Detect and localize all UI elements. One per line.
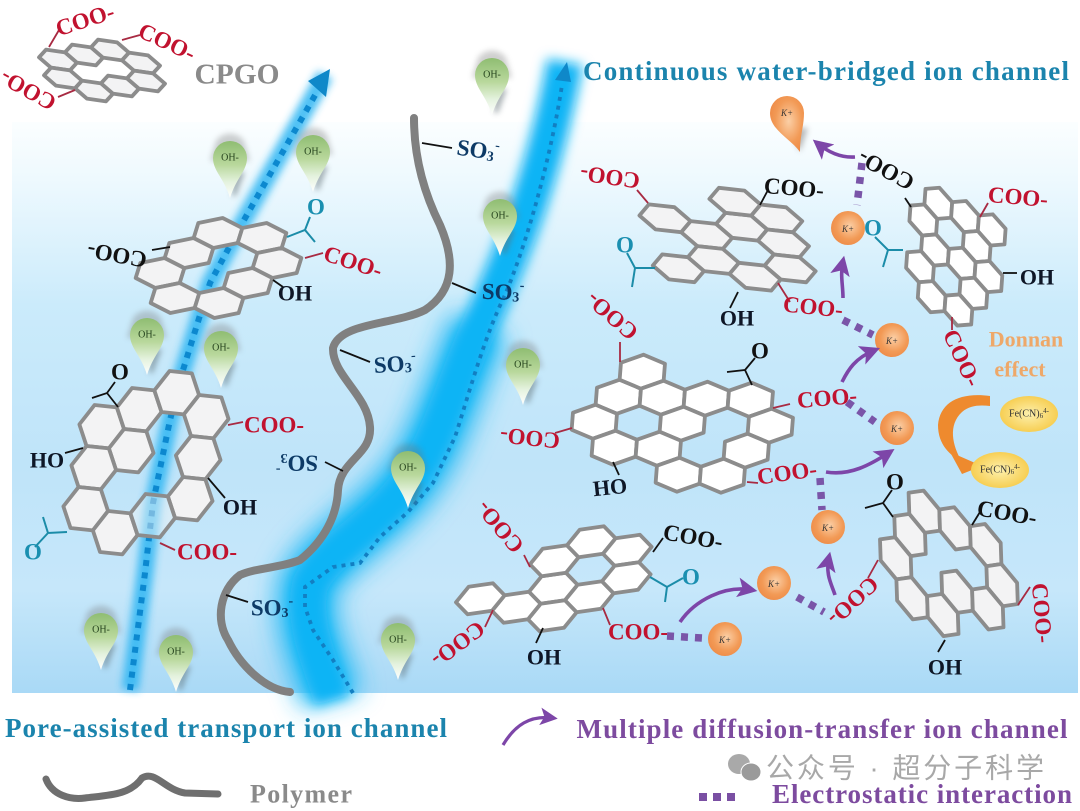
sheet: upper centre right: COO- (579, 160, 641, 194)
sheet: lower left: OH (223, 494, 257, 520)
Donnan effect arrows and Fe(CN)6 ions: 4- (1014, 463, 1021, 471)
sheet: upper centre right: COO- (782, 291, 844, 323)
sheet: lower right (823, 470, 1057, 680)
sheet: upper far right: COO- (854, 145, 918, 195)
Donnan effect label (989, 326, 1063, 382)
OH- ions: OH- (514, 360, 532, 370)
K+ ions and transfer paths: K+ (841, 224, 854, 234)
SO3 side groups: - (289, 594, 294, 608)
OH- ions: OH- (483, 70, 501, 80)
K+ ions and transfer paths: K+ (885, 336, 898, 346)
Donnan effect label: Donnan (989, 326, 1063, 352)
panel: membrane background (12, 122, 1078, 693)
legend arrow: multiple diffusion (503, 717, 553, 745)
sheet: lower left: COO- (244, 412, 304, 438)
Donnan effect arrows and Fe(CN)6 ions: 4- (1043, 407, 1050, 415)
legend label: polymer: Polymer (250, 780, 352, 808)
sheet: upper far right: COO- (938, 325, 986, 391)
K+ ions and transfer paths: K+ (780, 108, 793, 118)
channel dots: pore-assisted (130, 90, 318, 690)
Donnan effect arrows and Fe(CN)6 ions: 6 (1040, 412, 1044, 420)
sheet: lower right: COO- (975, 495, 1039, 531)
sheet: lower left: O (24, 540, 42, 564)
sheet: upper far right (850, 145, 1054, 391)
sheet: upper left: O (307, 194, 325, 220)
sheet: upper far right: COO- (987, 182, 1049, 212)
sheet: upper left: COO- (321, 241, 385, 283)
CPGO legend sheet: COO- (134, 18, 200, 66)
sheet: lower left: O (111, 360, 129, 384)
K+ ions and transfer paths (680, 96, 914, 656)
OH- ions: OH- (304, 146, 322, 158)
sheet: lower centre: O (682, 564, 700, 590)
caption: multiple diffusion-transfer channel: Multiple diffusion-transfer ion channel (576, 714, 1068, 744)
SO3 side groups: - (410, 348, 416, 363)
SO3 side groups: 3 (404, 360, 412, 376)
sheet: upper far right: O (864, 216, 882, 240)
sheet: lower left: HO (30, 448, 64, 472)
K+ ions and transfer paths: K+ (821, 523, 834, 533)
sheet: lower right: COO- (1027, 582, 1057, 644)
SO3 side groups: 3 (282, 606, 289, 620)
legend label: electrostatic interaction: Electrostatic interaction (772, 779, 1072, 809)
K+ ions and transfer paths: K+ (767, 579, 780, 589)
channel arrowhead: water-bridged (555, 62, 571, 82)
CPGO legend sheet (0, 0, 210, 115)
OH- ions: OH- (138, 330, 156, 340)
sheet: centre (499, 287, 864, 501)
SO3 side groups: - (275, 462, 280, 478)
sheet: upper centre right (544, 160, 911, 330)
sheet: lower centre: COO- (471, 496, 529, 558)
OH- ions: OH- (491, 210, 509, 222)
SO3 side groups: SO (455, 135, 489, 164)
label: CPGO: CPGO (194, 60, 280, 90)
OH- ions: OH- (389, 634, 407, 646)
sheet: lower centre (426, 496, 725, 672)
SO3 side groups: 3 (512, 290, 520, 305)
Donnan effect arrows and Fe(CN)6 ions: Fe(CN) (980, 464, 1011, 476)
sheet: lower right: COO- (823, 571, 883, 631)
sheet: upper centre right: COO- (763, 173, 825, 203)
sheet: upper centre right: O (616, 232, 634, 258)
sheet: upper far right: OH (1020, 264, 1054, 290)
OH- ions: OH- (167, 646, 185, 658)
channel arrowhead: pore-assisted (308, 69, 330, 97)
sheet: centre: COO- (499, 422, 561, 454)
channel dots: water-bridged (305, 85, 562, 693)
OH- ions: OH- (212, 342, 230, 354)
CPGO legend sheet: COO- (53, 0, 117, 41)
sheet: lower centre: OH (527, 644, 561, 670)
sheet: upper left: OH (278, 280, 312, 306)
SO3 side groups: SO (251, 596, 282, 620)
electrostatic dashes (667, 163, 875, 638)
SO3 side groups: 3 (486, 149, 495, 165)
sheet: centre: COO- (756, 456, 818, 490)
sheet: centre: COO- (581, 287, 643, 345)
sheet: lower left (0, 360, 310, 564)
sheet: upper left (82, 194, 385, 320)
K+ ions and transfer paths: K+ (890, 424, 903, 434)
title: continuous water-bridged channel: Continuous water-bridged ion channel (583, 56, 1069, 86)
sheet: upper centre right: OH (720, 306, 754, 330)
sheet: lower centre: COO- (608, 620, 668, 644)
SO3 side groups: SO (481, 279, 513, 305)
OH- ions (81, 51, 543, 692)
Donnan effect arrows and Fe(CN)6 ions (938, 395, 1058, 488)
sheet: upper left: COO- (85, 237, 149, 273)
SO3 side groups: - (494, 138, 501, 153)
SO3 side groups: - (519, 278, 525, 293)
SO3 side groups: SO (373, 351, 405, 378)
polymer chain (221, 118, 450, 692)
sheet: lower centre: COO- (661, 519, 725, 555)
OH- ions: OH- (221, 152, 239, 164)
SO3 side groups: 3 (280, 450, 287, 466)
channel glow: pore-assisted (130, 75, 325, 690)
sheet: centre: O (751, 338, 769, 364)
OH- ions: OH- (399, 462, 417, 474)
channel glow: water-bridged (306, 62, 565, 700)
sheet: lower centre: COO- (426, 616, 490, 672)
sheet: centre: HO (592, 473, 628, 501)
sheet: lower right: OH (928, 654, 962, 680)
legend icon: polymer (46, 776, 218, 798)
Donnan effect arrows and Fe(CN)6 ions: 6 (1011, 468, 1015, 476)
OH- ions: OH- (92, 624, 110, 636)
Donnan effect arrows and Fe(CN)6 ions: Fe(CN) (1009, 408, 1040, 420)
SO3 side groups: SO (287, 450, 318, 476)
sheet: lower left: COO- (177, 540, 237, 564)
SO3 side groups (226, 133, 525, 620)
Donnan effect label: effect (994, 356, 1046, 382)
sheet: lower right: O (886, 470, 904, 494)
legend icon: electrostatic (699, 793, 735, 801)
watermark: 公众号 · 超分子科学 (766, 752, 1044, 784)
K+ ions and transfer paths: K+ (718, 635, 731, 645)
caption: pore-assisted channel: Pore-assisted transport ion channel (5, 713, 447, 743)
sheet: centre: COO- (796, 383, 858, 413)
